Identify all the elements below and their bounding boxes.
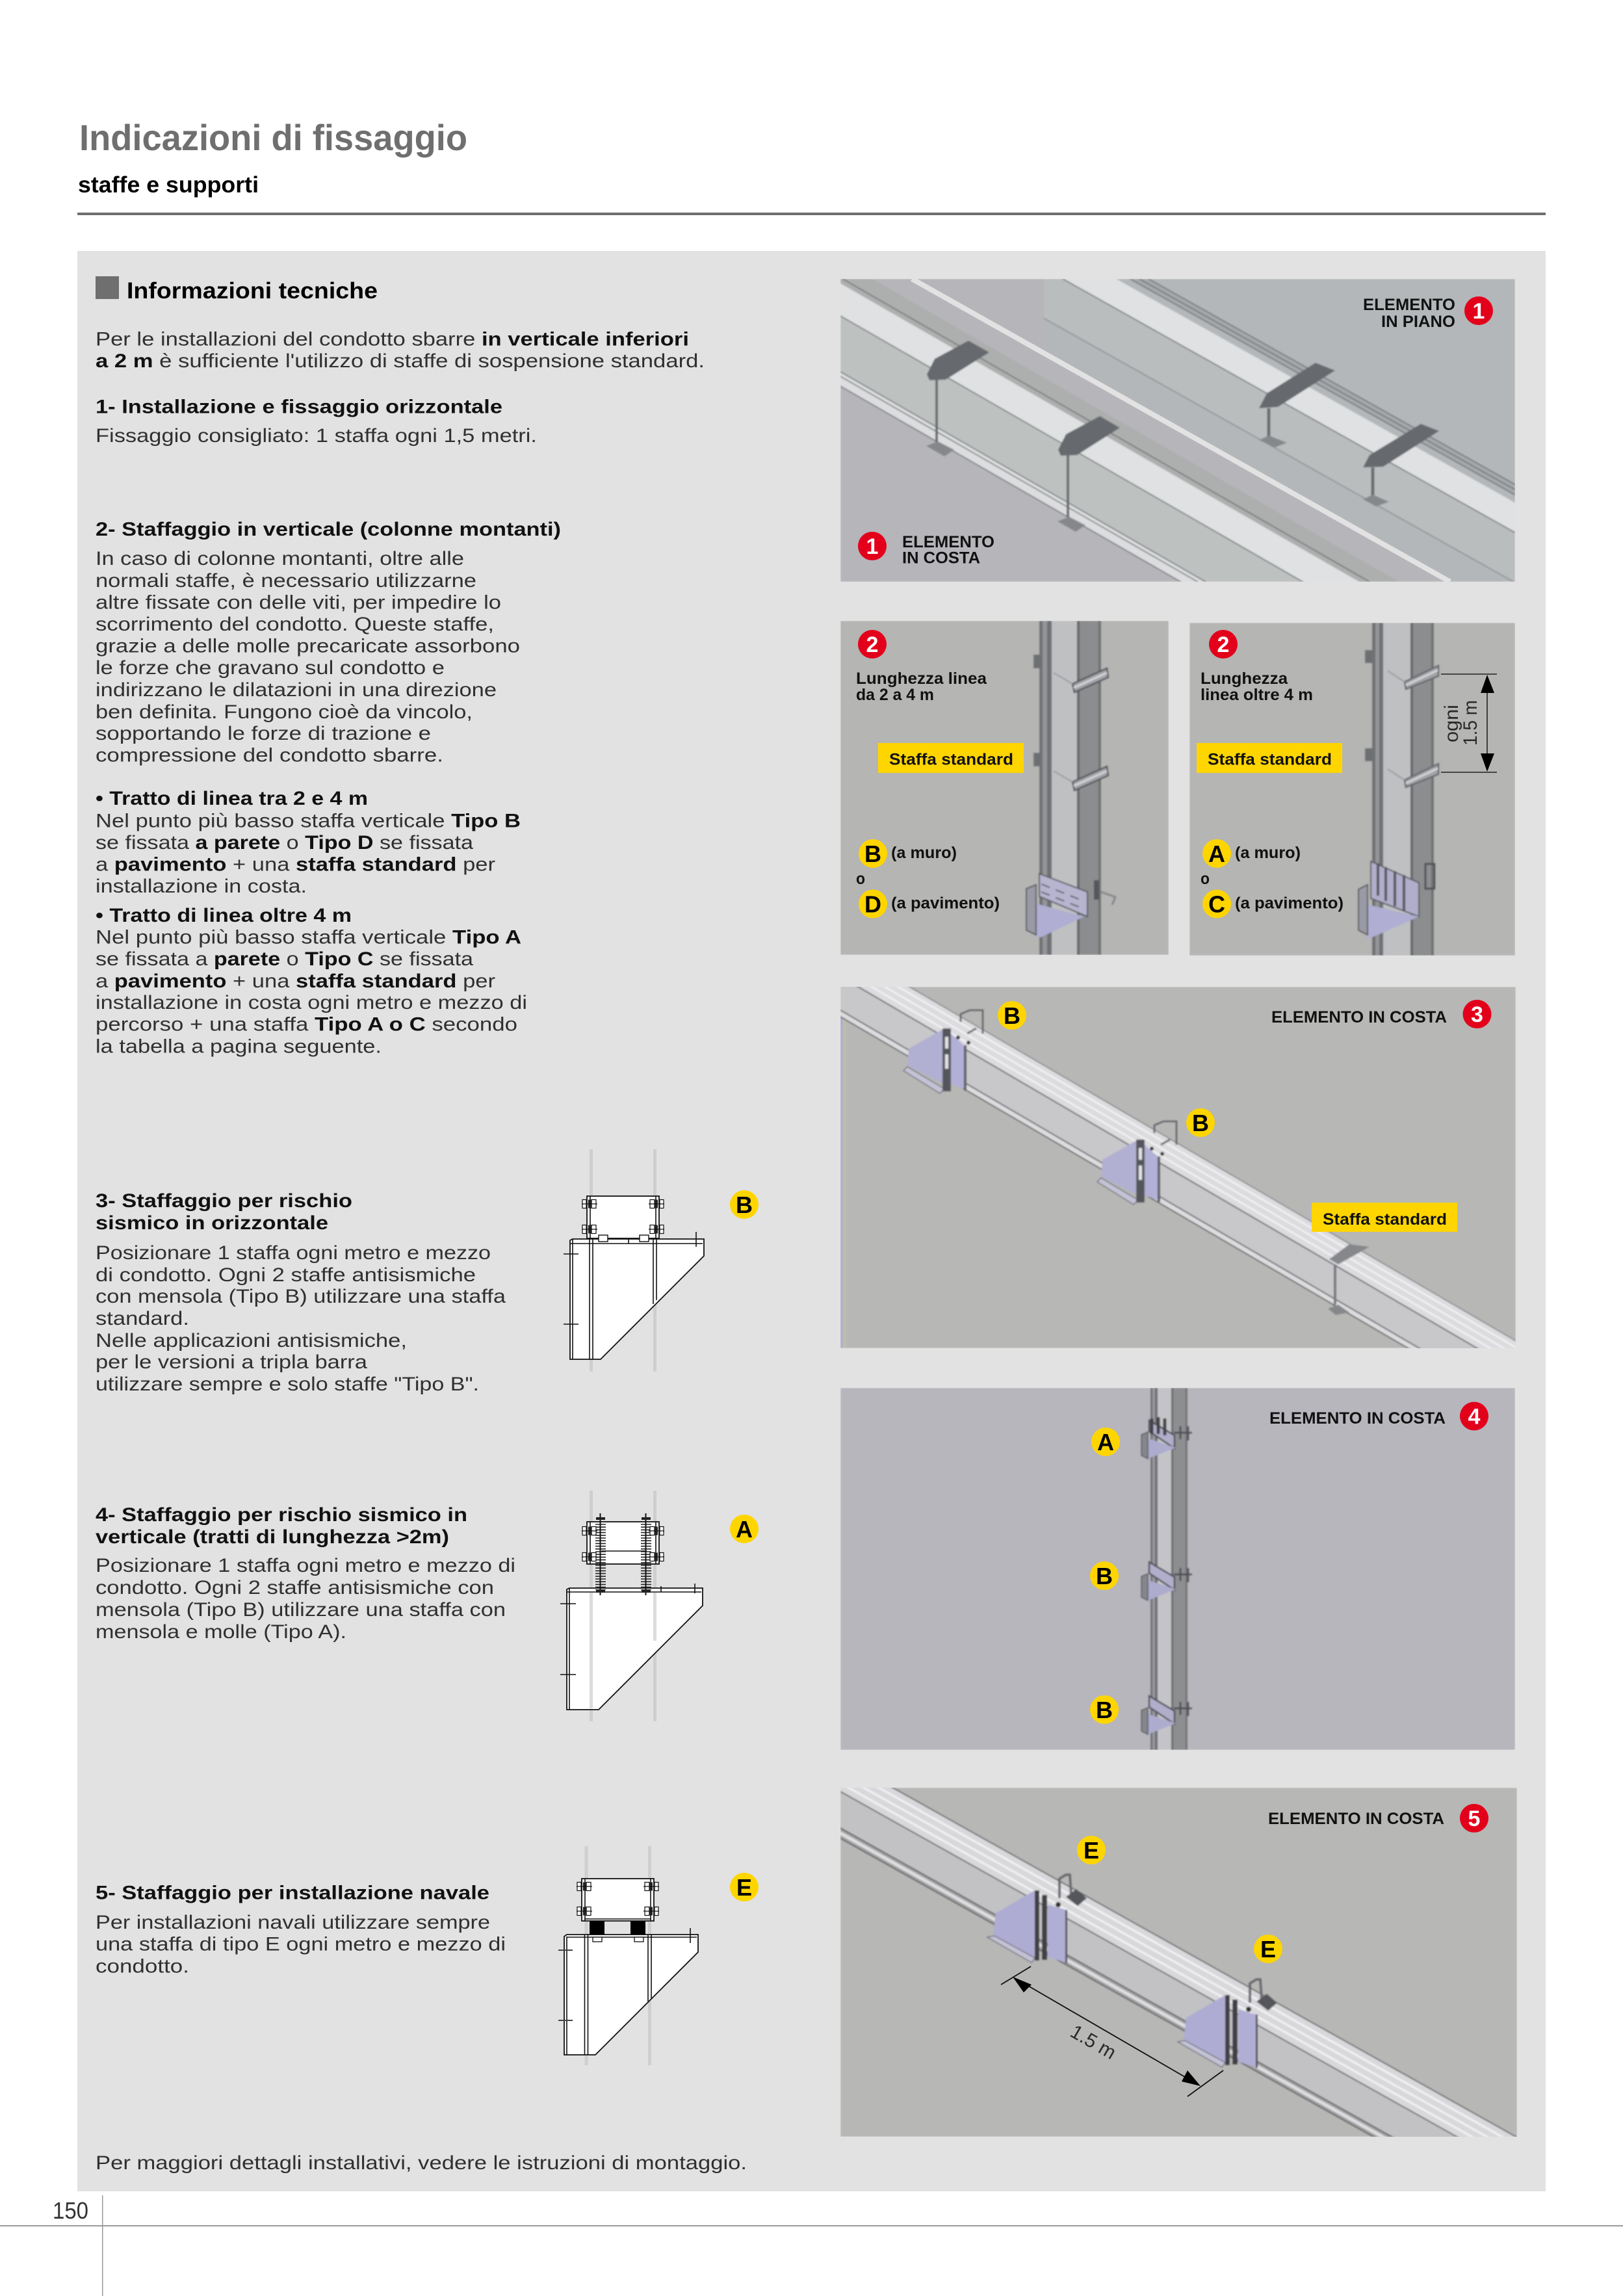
badge: 2 left: [858, 630, 887, 659]
badge: E panel 5 lower: [1254, 1935, 1282, 1963]
badge: E panel 5 upper: E: [1084, 1837, 1099, 1864]
label: elemento in piano: IN PIANO: [1381, 313, 1455, 331]
text block: section 5: condotto.: [96, 1955, 189, 1977]
text block: tratto tra 2 e 4 m: Nel punto più basso staffa verticale Tipo B: [96, 810, 521, 832]
text block: section 4: verticale (tratti di lunghezza >2m): [96, 1526, 449, 1548]
badge: B panel 4 upper: [1090, 1561, 1119, 1590]
badge: 4: 4: [1468, 1404, 1481, 1429]
text block: section 2: scorrimento del condotto. Queste staffe,: [96, 614, 494, 635]
text block: section 2: sopportando le forze di trazione e: [96, 723, 431, 744]
badge: 5: [1460, 1804, 1488, 1833]
label: elemento in costa: [902, 533, 994, 567]
badge: 5: 5: [1468, 1807, 1480, 1831]
photo scene: horizontal seismic brackets: [840, 946, 1516, 1411]
badge: 1 top: [1464, 296, 1493, 325]
text block: tratto oltre 4 m: Nel punto più basso staffa verticale Tipo A: [96, 927, 521, 948]
legend: C a pavimento: (a pavimento): [1235, 894, 1344, 913]
badge: B second: B: [1192, 1110, 1209, 1136]
label: elemento in costa: IN COSTA: [902, 549, 980, 567]
text block: section 2: indirizzano le dilatazioni in una direzione: [96, 679, 497, 701]
dimension arrow: 1.5 m: 1.5 m: [1067, 2021, 1119, 2064]
badge: E panel 5 upper: [1077, 1836, 1106, 1864]
title: Indicazioni di fissaggio: [79, 117, 467, 158]
text block: section 2: [96, 519, 561, 766]
label: lunghezza linea da 2 a 4 m: da 2 a 4 m: [856, 686, 934, 704]
text block: tratto oltre 4 m: installazione in costa ogni metro e mezzo di: [96, 992, 527, 1013]
label: lunghezza linea oltre 4 m: Lunghezza: [1201, 670, 1288, 688]
text block: section 2: ben definita. Fungono cioè da vincolo,: [96, 701, 473, 723]
legend: A a muro: [1202, 839, 1301, 868]
text block: section 3: [96, 1190, 506, 1395]
panel: technical information background: [77, 251, 1546, 2191]
badge: 1 bottom: 1: [866, 534, 878, 559]
text block: section 2: normali staffe, è necessario utilizzarne: [96, 570, 476, 592]
photo scene: elemento in costa and in piano: [840, 279, 1515, 582]
badge: 4: [1460, 1402, 1488, 1430]
text block: section 4: Posizionare 1 staffa ogni metro e mezzo di: [96, 1555, 515, 1576]
label: lunghezza linea da 2 a 4 m: Lunghezza linea: [856, 670, 987, 688]
text block: section 2: altre fissate con delle viti, per impedire lo: [96, 592, 501, 614]
text block: tratto tra 2 e 4 m: installazione in costa.: [96, 876, 307, 897]
text block: section 3: utilizzare sempre e solo staffe "Tipo B".: [96, 1374, 479, 1395]
badge: A: [730, 1515, 759, 1543]
badge: B panel 4 lower: [1090, 1695, 1119, 1724]
dimension arrow: ogni 1.5 m: ogni: [1441, 705, 1462, 742]
text block: section 2: compressione del condotto sbarre.: [96, 745, 443, 766]
text block: section 1: 1- Installazione e fissaggio orizzontale: [96, 397, 502, 417]
legend: B a muro: B: [864, 841, 881, 867]
text block: tratto oltre 4 m: [96, 905, 527, 1057]
tag: staffa standard left: [878, 743, 1024, 773]
heading: informazioni tecniche: Informazioni tecniche: [127, 278, 378, 304]
drawing: bracket type B: [564, 1149, 704, 1372]
label: elemento in costa: ELEMENTO: [902, 533, 994, 551]
text block: section 4: condotto. Ogni 2 staffe antisismiche con: [96, 1577, 494, 1598]
photo scene: riser oltre 4 m: [1189, 623, 1515, 956]
badge: B: B: [736, 1192, 753, 1218]
text block: section 4: mensola (Tipo B) utilizzare una staffa con: [96, 1599, 506, 1621]
tag: staffa standard right: Staffa standard: [1208, 750, 1332, 768]
tag: staffa standard panel 3: Staffa standard: [1323, 1210, 1447, 1229]
text block: tratto tra 2 e 4 m: a pavimento + una staffa standard per: [96, 854, 495, 875]
badge: 2 right: 2: [1217, 633, 1229, 657]
badge: B first: [998, 1001, 1026, 1030]
panel 5: naval installation photo: [840, 1758, 1517, 2217]
badge: 3: 3: [1471, 1002, 1483, 1027]
text block: section 5: Per installazioni navali utilizzare sempre: [96, 1912, 490, 1933]
text block: section 2: le forze che gravano sul condotto e: [96, 657, 445, 679]
legend: o: o: [856, 870, 865, 888]
drawing: bracket type E: [558, 1846, 698, 2065]
badge: 2 right: [1209, 630, 1238, 659]
dimension arrow: ogni 1.5 m: 1.5 m: [1460, 700, 1481, 746]
text block: section 4: mensola e molle (Tipo A).: [96, 1621, 346, 1643]
label: elemento in costa 3: ELEMENTO IN COSTA: [1271, 1008, 1447, 1026]
panel 2a: vertical line from 2 to 4 m: [840, 621, 1169, 955]
dimension arrow: ogni 1.5 m: [1441, 674, 1497, 772]
text block: section 2: In caso di colonne montanti, oltre alle: [96, 548, 464, 569]
badge: A panel 4: [1091, 1428, 1120, 1456]
text block: introduction: [96, 329, 705, 372]
label: elemento in costa 4: ELEMENTO IN COSTA: [1269, 1409, 1446, 1428]
text block: tratto oltre 4 m: se fissata a parete o Tipo C se fissata: [96, 948, 473, 970]
text block: tratto oltre 4 m: • Tratto di linea oltre 4 m: [96, 905, 352, 926]
badge: E: [730, 1873, 759, 1901]
photo scene: riser 2 a 4 m: [840, 621, 1169, 955]
text block: section 3: con mensola (Tipo B) utilizzare una staffa: [96, 1286, 506, 1307]
text block: section 5: 5- Staffaggio per installazione navale: [96, 1883, 489, 1903]
label: lunghezza linea da 2 a 4 m: [856, 670, 987, 704]
text block: section 3: sismico in orizzontale: [96, 1212, 328, 1234]
label: elemento in piano: [1363, 296, 1455, 331]
panel 4: seismic vertical photo: [840, 1388, 1515, 1750]
photo scene: vertical seismic brackets: [840, 1388, 1515, 1750]
text block: section 4: [96, 1504, 515, 1643]
text block: tratto oltre 4 m: la tabella a pagina seguente.: [96, 1036, 382, 1057]
legend: C a pavimento: C: [1208, 891, 1225, 918]
badge: B: [730, 1190, 759, 1219]
text block: section 2: grazie a delle molle precaricate assorbono: [96, 636, 520, 657]
badge: 3: [1462, 1000, 1491, 1028]
drawing: bracket type A: [560, 1491, 703, 1721]
text block: section 5: una staffa di tipo E ogni metro e mezzo di: [96, 1933, 506, 1955]
tag: staffa standard panel 3: [1312, 1203, 1457, 1232]
text block: section 3: standard.: [96, 1308, 189, 1329]
badge: B second: [1186, 1108, 1215, 1137]
text block: section 3: di condotto. Ogni 2 staffe antisismiche: [96, 1264, 476, 1286]
label: lunghezza linea oltre 4 m: linea oltre 4 m: [1201, 686, 1313, 704]
text block: introduction: Per le installazioni del condotto sbarre in verticale inferiori: [96, 329, 689, 350]
badge: A: A: [736, 1516, 753, 1543]
legend: A a muro: (a muro): [1235, 844, 1301, 862]
dimension arrow: 1.5 m: [1001, 1966, 1223, 2096]
text block: section 2: 2- Staffaggio in verticale (colonne montanti): [96, 519, 561, 540]
panel 2b: vertical line over 4 m: [1189, 623, 1515, 956]
badge: B panel 4 upper: B: [1096, 1563, 1113, 1589]
text block: section 3: 3- Staffaggio per rischio: [96, 1190, 352, 1212]
text block: tratto tra 2 e 4 m: • Tratto di linea tra 2 e 4 m: [96, 788, 368, 809]
legend: D a pavimento: D: [864, 891, 881, 918]
badge: E panel 5 lower: E: [1260, 1936, 1276, 1963]
badge: 1 bottom: [858, 532, 887, 560]
badge: A panel 4: A: [1097, 1429, 1114, 1455]
text block: section 1: Fissaggio consigliato: 1 staffa ogni 1,5 metri.: [96, 425, 537, 447]
legend: o right: o: [1201, 870, 1210, 888]
legend: B a muro: [859, 839, 957, 868]
badge: B first: B: [1004, 1002, 1020, 1029]
photo scene: naval brackets: [840, 1758, 1517, 2217]
text block: section 3: per le versioni a tripla barra: [96, 1351, 367, 1373]
tag: staffa standard left: Staffa standard: [889, 750, 1013, 768]
legend: A a muro: A: [1208, 841, 1225, 867]
label: lunghezza linea oltre 4 m: [1201, 670, 1313, 704]
badge: E: E: [736, 1874, 752, 1901]
text block: tratto tra 2 e 4 m: [96, 788, 521, 897]
page number: 150: [53, 2197, 88, 2224]
subtitle: staffe e supporti: [78, 172, 259, 198]
legend: C a pavimento: [1202, 889, 1344, 918]
tag: staffa standard right: [1197, 743, 1342, 773]
text block: introduction: a 2 m è sufficiente l'utilizzo di staffe di sospensione standard.: [96, 350, 705, 372]
label: elemento in costa 5: ELEMENTO IN COSTA: [1268, 1810, 1444, 1828]
text block: section 3: Nelle applicazioni antisismiche,: [96, 1330, 407, 1351]
panel 3: seismic horizontal photo: [840, 946, 1516, 1411]
badge: 1 top: 1: [1473, 299, 1485, 324]
legend: D a pavimento: (a pavimento): [891, 894, 1000, 913]
text block: tratto tra 2 e 4 m: se fissata a parete o Tipo D se fissata: [96, 832, 473, 854]
text block: section 5: [96, 1883, 506, 1977]
badge: 2 left: 2: [866, 633, 878, 657]
panel 1: horizontal installation photo: [840, 279, 1515, 582]
text block: section 4: 4- Staffaggio per rischio sismico in: [96, 1504, 467, 1526]
text block: section 1: [96, 397, 537, 447]
footnote: Per maggiori dettagli installativi, vedere le istruzioni di montaggio.: [96, 2152, 747, 2174]
divider between scenes: [912, 279, 1450, 582]
legend: D a pavimento: [859, 889, 1000, 918]
badge: B panel 4 lower: B: [1096, 1697, 1113, 1723]
legend: B a muro: (a muro): [891, 844, 957, 862]
label: elemento in piano: ELEMENTO: [1363, 296, 1455, 314]
text block: tratto oltre 4 m: percorso + una staffa Tipo A o C secondo: [96, 1014, 517, 1035]
text block: section 3: Posizionare 1 staffa ogni metro e mezzo: [96, 1242, 491, 1264]
text block: tratto oltre 4 m: a pavimento + una staffa standard per: [96, 971, 495, 992]
